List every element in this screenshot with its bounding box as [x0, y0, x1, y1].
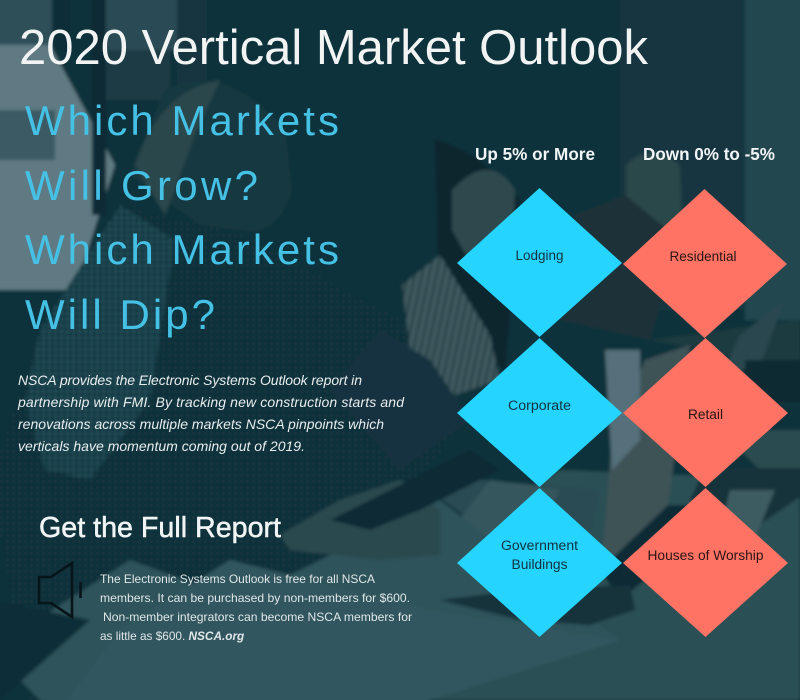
hand and sleeve [280, 480, 440, 560]
head and hair of left man [130, 81, 292, 232]
headline question [25, 97, 339, 338]
woman [435, 140, 520, 370]
diamond: Lodging [457, 188, 622, 337]
title: 2020 Vertical Market Outlook [19, 21, 648, 75]
intro paragraph [17, 372, 405, 454]
diamond: Retail [623, 338, 788, 487]
diamond: Houses of Worship [623, 488, 788, 637]
intro paragraph: NSCA provides the Electronic Systems Outlook report in [18, 372, 362, 388]
intro paragraph: renovations across multiple markets NSCA pinpoints which [18, 416, 384, 432]
diamond: Government Buildings [457, 488, 622, 637]
diamond: Government Buildings: Government [501, 538, 578, 553]
report description: The Electronic Systems Outlook is free for all NSCA [100, 572, 375, 586]
diamond: Residential [623, 189, 787, 338]
table, paper and laptop [300, 470, 800, 700]
report description: Non-member integrators can become NSCA members for [103, 610, 412, 624]
diamond: Retail: Retail [688, 407, 723, 422]
column heading: down: Down 0% to -5% [643, 144, 775, 164]
report description [100, 572, 412, 643]
report description: members. It can be purchased by non-members for $600. [100, 591, 410, 605]
icon: speaker [39, 563, 80, 617]
shirt of left man [0, 205, 470, 700]
headline question: Will Grow? [25, 162, 258, 209]
headline question: Will Dip? [25, 291, 215, 338]
column heading: up: Up 5% or More [475, 144, 595, 164]
diamond: Government Buildings: Buildings [512, 557, 568, 572]
diamond: Corporate: Corporate [508, 398, 571, 413]
man on right [626, 152, 682, 240]
intro paragraph: partnership with FMI. By tracking new construction starts and [17, 394, 405, 410]
report description: as little as $600. NSCA.org [100, 629, 244, 643]
diamond: Houses of Worship: Houses of Worship [648, 548, 764, 563]
diamond: Residential: Residential [670, 249, 736, 264]
headline question: Which Markets [25, 226, 339, 273]
diamond: Corporate [457, 338, 622, 487]
headline question: Which Markets [25, 97, 339, 144]
diamond: Lodging: Lodging [516, 248, 564, 263]
intro paragraph: verticals have momentum coming out of 2019. [18, 438, 305, 454]
report heading: Get the Full Report [39, 512, 281, 544]
